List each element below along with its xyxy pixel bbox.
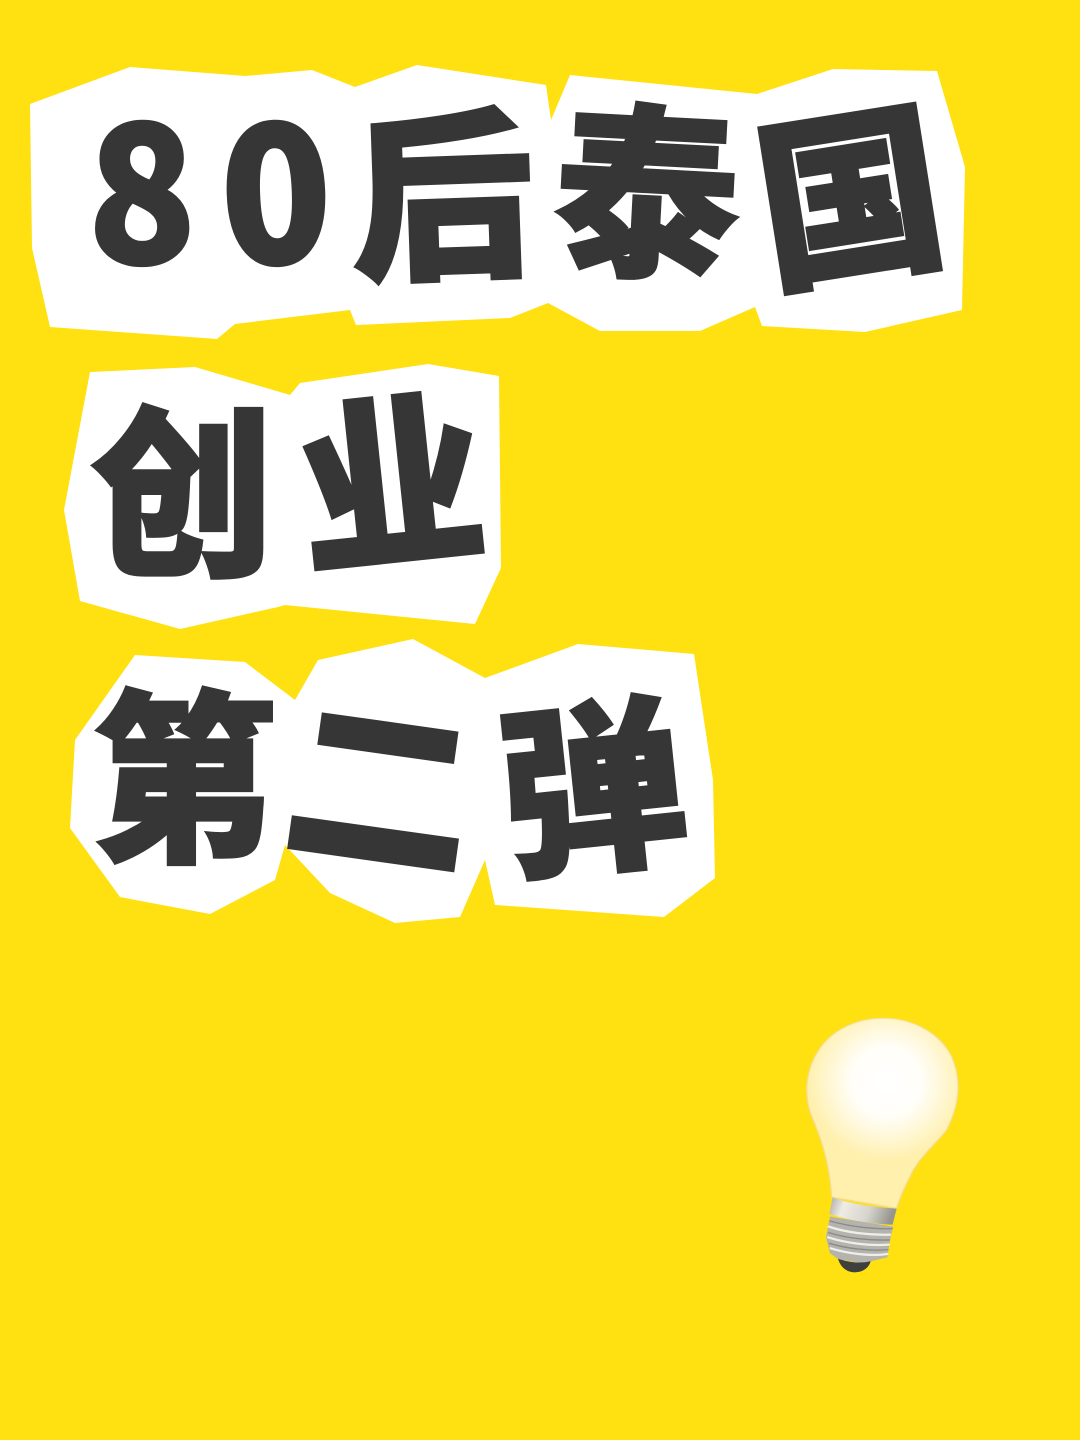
screw base (826, 1217, 893, 1263)
collar (829, 1197, 897, 1225)
bulb glass (807, 1018, 958, 1208)
title line 1: 80后泰国 (30, 39, 965, 339)
glyph 泰: 泰 (548, 43, 747, 321)
glass glow (813, 1018, 958, 1156)
glyph 8: 8 (88, 46, 196, 317)
paper cutout: line 2 (64, 364, 501, 629)
paper cutout: line 1 (30, 65, 965, 339)
tip (838, 1259, 871, 1272)
paper cutout: line 3 (70, 639, 715, 923)
glyph 创: 创 (90, 349, 274, 614)
glyph 二: 二 (272, 631, 493, 922)
glyph 第: 第 (92, 633, 276, 901)
title line 2: 创业 (64, 329, 501, 629)
poster canvas (30, 65, 965, 1272)
title line 3: 第二弹 (70, 631, 715, 923)
glyph 业: 业 (284, 329, 496, 615)
icon: light bulb (807, 1003, 965, 1272)
glyph 后: 后 (346, 49, 538, 320)
thread highlights (828, 1227, 890, 1255)
glyph 0: 0 (216, 45, 336, 320)
glyph 国: 国 (736, 39, 961, 333)
glyph 弹: 弹 (485, 634, 697, 920)
